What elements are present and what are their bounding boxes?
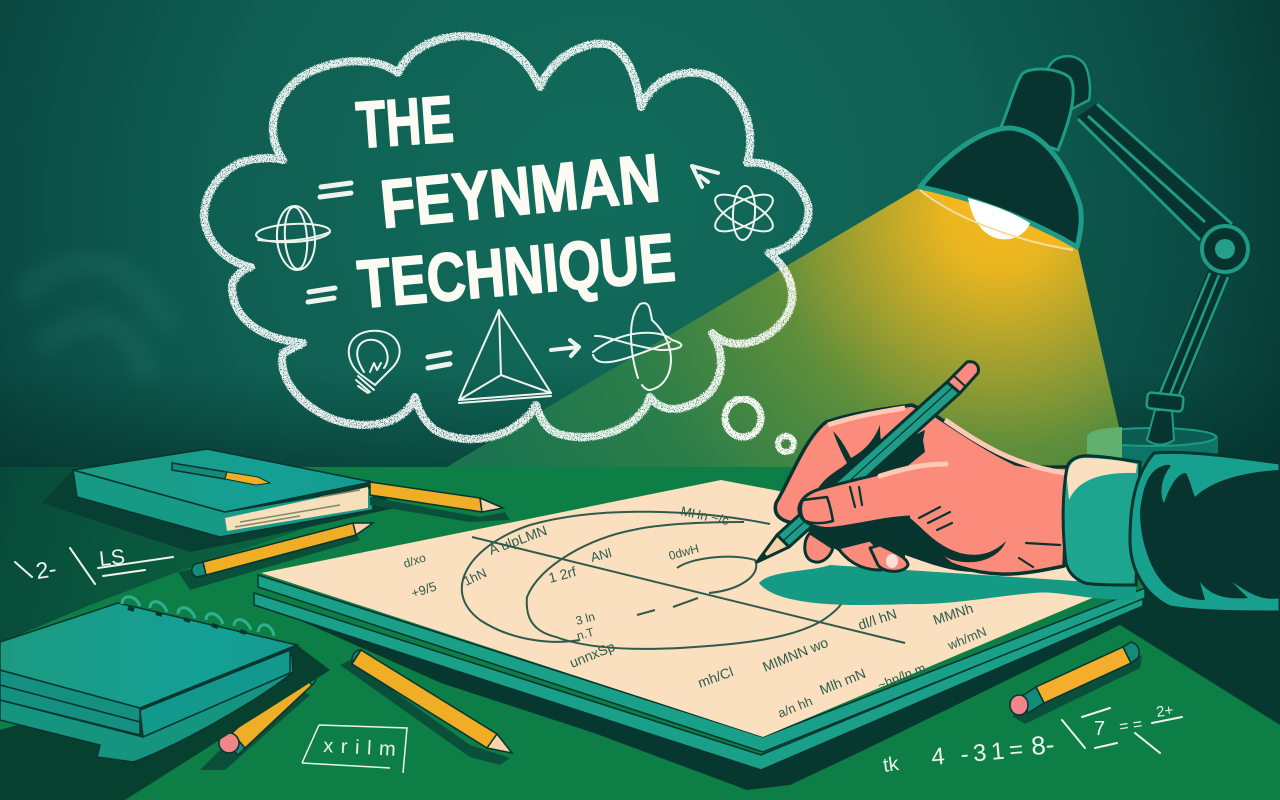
handwritten formula marks: Mlh mN [817, 665, 868, 698]
handwritten formula marks: 0dwH [667, 541, 700, 563]
thumb outline [799, 468, 910, 528]
chalk math: box [302, 725, 407, 773]
chalk math: left: 2- [34, 555, 58, 584]
light beam [445, 187, 1125, 468]
title: TECHNIQUE [355, 220, 678, 323]
title: FEYNMAN [377, 140, 663, 243]
lamp glow arc [920, 190, 1073, 250]
pencil under book [192, 523, 373, 577]
thought bubble circles [725, 399, 794, 452]
shirt cuff [1063, 456, 1140, 585]
pencil lead [757, 553, 769, 562]
thumb nail [801, 497, 833, 523]
finger three [870, 545, 908, 571]
chalk math: bottom right: 8- [1030, 729, 1056, 761]
handwritten formula marks: dl/l hN [856, 605, 899, 633]
chalk math: bottom right [882, 702, 1182, 777]
handwritten formula marks: d/xo [402, 550, 428, 571]
spiral wire [122, 597, 274, 636]
handwritten formula marks: mh/Cl [696, 663, 735, 691]
lamp base [1087, 427, 1218, 470]
dark folds under thumb [806, 517, 1006, 572]
paper edges [254, 575, 1145, 770]
handwritten formula marks: ~hn/ln m [876, 660, 928, 693]
chalk math: bottom right: 4 -31= [930, 736, 1024, 771]
thumb highlight [880, 464, 946, 476]
lamp bulb [968, 198, 1030, 239]
icon: atom [710, 185, 778, 241]
chalk math: bottom right: 2+ [1155, 702, 1175, 721]
icon: pyramid [459, 310, 551, 403]
pencil on book [172, 463, 270, 485]
chalk math: bottom right: 7 [1094, 718, 1105, 740]
pencil lower middle [352, 650, 512, 753]
pencils [178, 482, 1142, 770]
lamp lower arm [1158, 270, 1230, 400]
handwritten formula marks: 1hN [461, 565, 489, 589]
handwritten formula marks: 1 2rf [547, 563, 578, 586]
spiral notebook [0, 597, 330, 800]
lamp joint [1202, 226, 1248, 272]
chalk math: box: xrilm [323, 735, 398, 761]
handwritten formula marks: ANl [589, 545, 613, 565]
handwritten formula marks: MIMNN wo [760, 634, 831, 675]
handwritten formula marks: wh/mN [945, 624, 989, 653]
handwritten formula marks [402, 503, 989, 721]
lamp [920, 56, 1248, 470]
lamp neck cap [1047, 56, 1090, 110]
table [0, 467, 1280, 800]
lamp neck [1000, 69, 1073, 150]
fingernail highlight [886, 554, 898, 568]
handwritten formula marks: n.T [575, 625, 596, 643]
chalkboard background [0, 0, 1280, 470]
handwritten formula marks: a/n hh [776, 693, 815, 721]
handwritten formula marks: MHn ~/c [679, 503, 731, 528]
hand highlights [828, 408, 1065, 473]
thought cloud [204, 36, 808, 452]
pencil shadows [178, 497, 1142, 770]
sleeve [1130, 452, 1280, 612]
handwritten formula marks: unnxSp [567, 638, 617, 671]
lamp shade [920, 128, 1081, 247]
chalk doodles [256, 166, 778, 403]
chalk smudges [20, 261, 170, 380]
chalk math: bottom right: tk [882, 753, 901, 777]
pencil right [1010, 642, 1139, 715]
handwritten formula marks: MMNh [931, 600, 975, 628]
handwritten formula marks: 3 ln [574, 609, 596, 628]
title [354, 81, 678, 323]
icon: orbit sketch [593, 303, 681, 390]
cloud outline [204, 36, 808, 439]
book top-left [42, 449, 395, 552]
pencil right of book [370, 482, 503, 512]
worksheet with diagram [254, 480, 1170, 770]
chalk math: bottom right: = = [1118, 716, 1143, 736]
pencil lower left [219, 669, 316, 755]
chalk math: left [15, 545, 173, 584]
crevices by pencil [816, 425, 925, 492]
lamp upper arm [1077, 103, 1235, 243]
title: THE [354, 81, 456, 162]
icon: light bulb [349, 331, 400, 393]
diagram circles [462, 512, 905, 649]
hand [757, 362, 1068, 574]
pencil shadow on paper [759, 565, 1136, 605]
lamp inner glow [921, 190, 1075, 249]
thumb [799, 463, 946, 528]
palm and back of hand [775, 405, 1068, 574]
equals marks [308, 183, 450, 368]
lamp collar [1146, 392, 1184, 444]
finger one [805, 533, 833, 562]
handwritten formula marks: A ulpLMN [487, 522, 549, 558]
knuckle lines [850, 487, 1060, 567]
arrow marker [692, 166, 718, 187]
finger two [838, 540, 886, 570]
paper shadow [254, 600, 1145, 790]
pencil in hand [757, 362, 978, 562]
icon: globe with orbit [256, 205, 330, 271]
chalk math: left: LS [98, 545, 126, 571]
arrow [551, 340, 579, 356]
handwritten formula marks: +9/5 [409, 579, 438, 601]
